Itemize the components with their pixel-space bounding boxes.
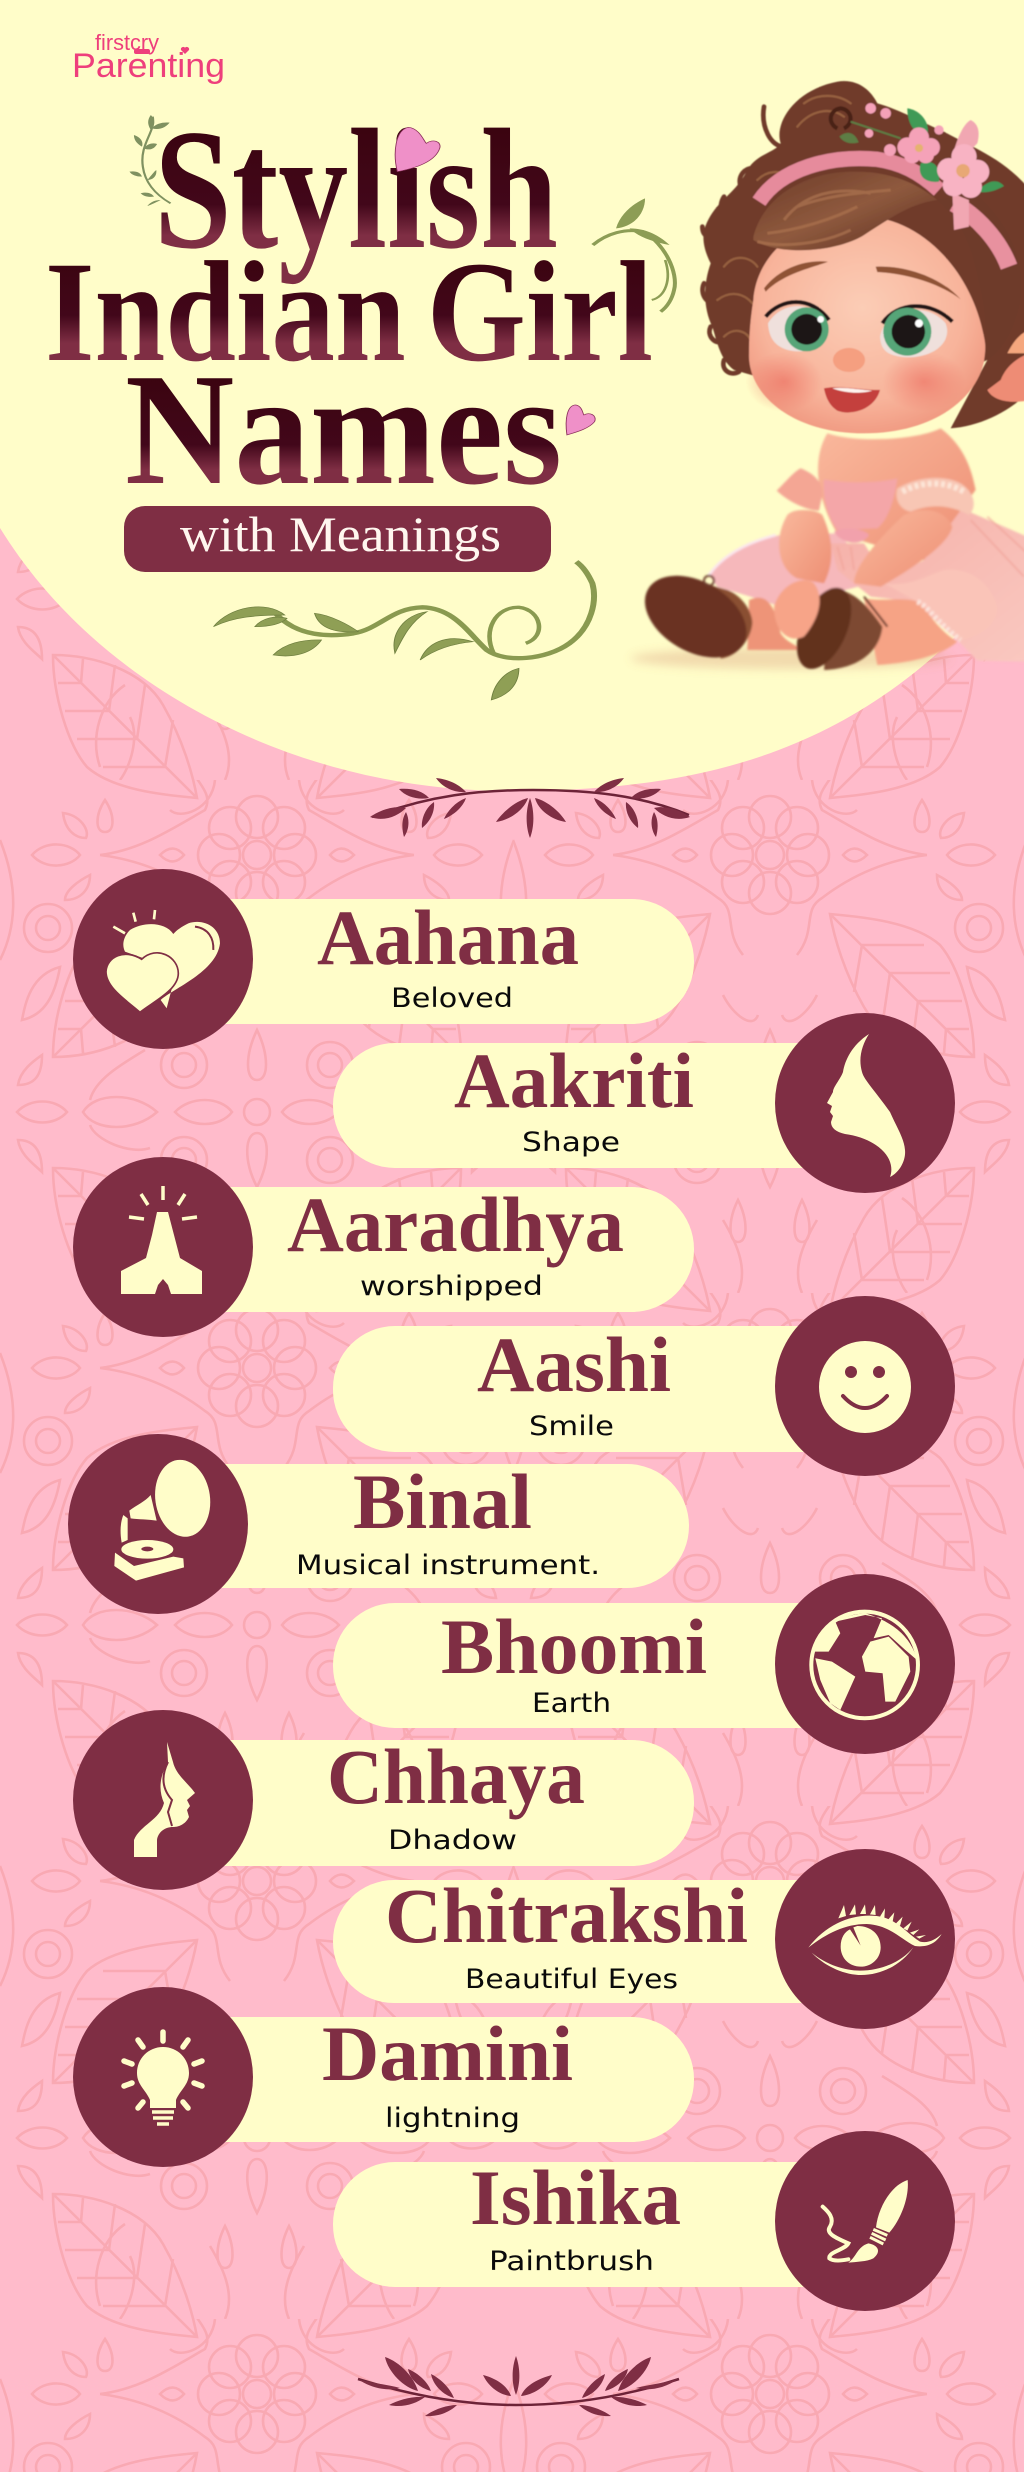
card: Aakriti: Aakriti	[454, 1037, 694, 1124]
card: Damini: Damini	[322, 2010, 573, 2097]
title line 3: Names	[125, 340, 562, 518]
fringe	[753, 172, 937, 250]
title line 2: Indian Girl	[45, 233, 653, 392]
icon: eye	[808, 1904, 942, 1975]
face	[749, 216, 985, 433]
card: Ishika: Paintbrush	[489, 2246, 654, 2277]
leaves on flower crown	[907, 108, 1004, 192]
title line 1: Stylish	[154, 95, 558, 285]
ornament: top leaf branch	[370, 778, 690, 838]
subtitle pill: with Meanings	[124, 506, 551, 572]
icon: light bulb	[124, 2032, 202, 2124]
card: Ishika	[333, 2131, 955, 2311]
icon: smiley	[819, 1341, 911, 1433]
header panel: cream curved area	[0, 0, 1024, 791]
ornament: bottom leaf branch	[358, 2356, 679, 2416]
icon: small pink heart	[566, 405, 595, 435]
card: Bhoomi: Earth	[532, 1688, 611, 1719]
card: Chhaya: Dhadow	[388, 1825, 517, 1856]
big flower	[937, 144, 989, 198]
logo: FirstCry Parenting: firstcry	[95, 30, 159, 55]
title: Stylish Indian Girl Names	[45, 95, 653, 518]
subtitle pill: with Meanings: with Meanings	[180, 506, 501, 562]
curls	[702, 107, 784, 373]
bun swirl	[831, 108, 851, 128]
card: Aaradhya	[73, 1157, 694, 1337]
left eye	[768, 306, 828, 351]
card: Damini	[73, 1987, 694, 2167]
card: Aaradhya: worshipped	[360, 1271, 543, 1302]
baby head	[702, 81, 1024, 433]
headband	[759, 159, 939, 202]
icon: bottom green vine	[214, 562, 594, 700]
logo: FirstCry Parenting	[72, 30, 225, 85]
icon: double profile	[134, 1742, 195, 1857]
icon: large pink heart	[395, 127, 440, 172]
icon: gramophone	[114, 1456, 215, 1581]
card: Bhoomi	[333, 1574, 955, 1754]
right eye	[880, 310, 947, 357]
illustration: baby girl	[631, 81, 1024, 677]
icon: right curling vine	[593, 198, 675, 312]
card: Aashi: Aashi	[477, 1321, 671, 1408]
card: Aakriti	[333, 1013, 955, 1193]
baby body, dress and shoes	[631, 428, 1024, 677]
card: Bhoomi: Bhoomi	[441, 1603, 707, 1690]
icon: left sprig beside title	[129, 115, 171, 206]
card: Damini: lightning	[385, 2103, 520, 2134]
card: Binal	[68, 1434, 689, 1614]
icon: praying hands	[121, 1186, 202, 1294]
brows	[764, 261, 828, 292]
ear	[987, 353, 1024, 402]
small flower	[865, 103, 944, 163]
card: Chhaya: Chhaya	[327, 1733, 585, 1820]
card: Chhaya	[73, 1710, 694, 1890]
card: Aaradhya: Aaradhya	[287, 1181, 624, 1268]
card: Chitrakshi: Beautiful Eyes	[465, 1964, 678, 1995]
icon: globe	[811, 1612, 918, 1718]
card: Ishika: Ishika	[470, 2154, 681, 2241]
card: Aashi: Smile	[529, 1411, 614, 1442]
card: Chitrakshi	[333, 1849, 955, 2029]
nose	[833, 348, 865, 372]
card: Aahana: Aahana	[317, 894, 579, 981]
logo: FirstCry Parenting: Parenting	[72, 47, 225, 85]
hair mass	[703, 81, 1024, 428]
card: Binal: Musical instrument.	[296, 1550, 600, 1581]
card: Aashi	[333, 1296, 955, 1476]
card: Aahana	[73, 869, 694, 1049]
icon: paintbrush	[823, 2180, 908, 2263]
card: Aahana: Beloved	[391, 983, 513, 1014]
card: Chitrakshi: Chitrakshi	[385, 1872, 748, 1959]
icon: woman profile	[827, 1034, 905, 1177]
mouth	[824, 387, 880, 412]
card: Aakriti: Shape	[522, 1127, 620, 1158]
icon: two hearts	[106, 910, 220, 1012]
card: Binal: Binal	[353, 1458, 532, 1545]
cheeks	[746, 352, 822, 412]
